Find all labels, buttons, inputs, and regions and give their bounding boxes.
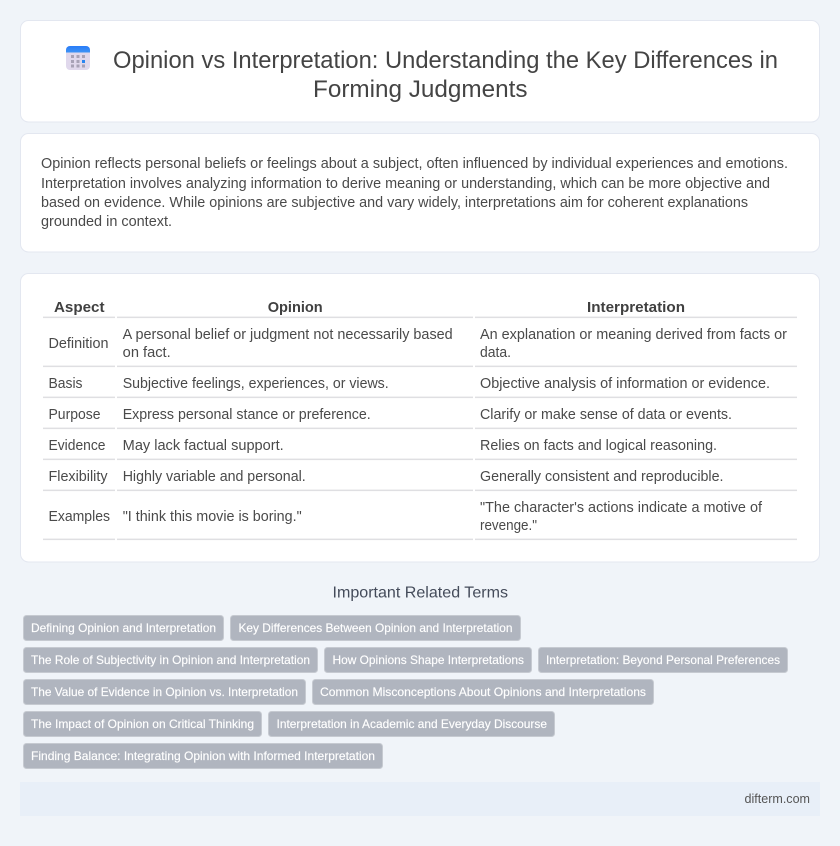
related term tags xyxy=(24,616,788,768)
panel: header xyxy=(20,20,820,122)
tag: Interpretation in Academic and Everyday Discourse xyxy=(276,717,547,731)
row: basis: Subjective feelings, experiences, or views. xyxy=(123,376,389,392)
tag xyxy=(24,680,306,704)
tag: The Value of Evidence in Opinion vs. Interpretation xyxy=(31,685,298,699)
text block: summary xyxy=(41,156,788,230)
row: purpose: Express personal stance or preference. xyxy=(123,407,371,423)
row: purpose: Clarify or make sense of data or events. xyxy=(480,407,732,423)
tag xyxy=(268,712,554,736)
row: evidence: Relies on facts and logical reasoning. xyxy=(480,438,717,454)
tag xyxy=(312,680,654,704)
row: examples: "The character's actions indicate a motive of xyxy=(480,500,763,516)
row: flexibility: Highly variable and personal. xyxy=(123,469,306,485)
title xyxy=(113,47,778,103)
icon: calendar xyxy=(66,46,90,70)
panel: summary paragraph xyxy=(20,134,820,252)
panel: comparison table xyxy=(20,274,820,562)
tag xyxy=(230,616,520,640)
row: flexibility: Generally consistent and reproducible. xyxy=(480,469,724,485)
row: flexibility: Flexibility xyxy=(48,469,108,485)
row: definition: on fact. xyxy=(123,345,171,361)
row: definition xyxy=(48,327,787,361)
table header: Interpretation xyxy=(587,299,685,316)
footer text: difterm.com xyxy=(744,791,810,806)
row: definition: Definition xyxy=(48,336,108,352)
tag: The Impact of Opinion on Critical Thinking xyxy=(31,717,254,731)
tag xyxy=(24,744,382,768)
row: examples: Examples xyxy=(48,509,110,525)
row: examples: revenge." xyxy=(480,518,537,534)
title: Forming Judgments xyxy=(313,76,528,103)
tag xyxy=(24,712,262,736)
row: definition: An explanation or meaning derived from facts or xyxy=(480,327,787,343)
row: examples: "I think this movie is boring." xyxy=(123,509,302,525)
table header: Aspect xyxy=(54,299,104,316)
tag: Finding Balance: Integrating Opinion with Informed Interpretation xyxy=(31,749,375,763)
tag: The Role of Subjectivity in Opinion and Interpretation xyxy=(31,653,310,667)
row: definition: A personal belief or judgment not necessarily based xyxy=(123,327,453,343)
row: definition: data. xyxy=(480,345,511,361)
tag: Interpretation: Beyond Personal Preferences xyxy=(546,653,780,667)
row: examples xyxy=(48,500,763,534)
table header: Opinion xyxy=(268,299,323,316)
text block: summary: Opinion reflects personal beliefs or feelings about a subject, often influenced by individual experiences and emotions. xyxy=(41,156,788,172)
tag: Defining Opinion and Interpretation xyxy=(31,621,216,635)
heading: important related terms: Important Related Terms xyxy=(332,584,508,602)
text block: summary: grounded in context. xyxy=(41,214,172,230)
footer bar xyxy=(20,782,820,816)
tag xyxy=(324,648,532,672)
tag xyxy=(24,648,318,672)
row: evidence: May lack factual support. xyxy=(123,438,284,454)
row: evidence: Evidence xyxy=(48,438,106,454)
row: purpose xyxy=(48,407,732,423)
table header xyxy=(54,299,685,316)
tag: Common Misconceptions About Opinions and Interpretations xyxy=(320,685,646,699)
tag: Key Differences Between Opinion and Interpretation xyxy=(238,621,512,635)
tag: How Opinions Shape Interpretations xyxy=(332,653,524,667)
row: basis: Basis xyxy=(48,376,82,392)
title: Opinion vs Interpretation: Understanding the Key Differences in xyxy=(113,47,778,74)
row: basis: Objective analysis of information or evidence. xyxy=(480,376,770,392)
text block: summary: based on evidence. While opinions are subjective and vary widely, interpretations aim for coherent explanations xyxy=(41,195,748,211)
tag xyxy=(24,616,224,640)
row: basis xyxy=(48,376,770,392)
text block: summary: Interpretation involves analyzing information to derive meaning or understanding, which can be more objective and xyxy=(41,176,770,192)
row: purpose: Purpose xyxy=(48,407,100,423)
tag xyxy=(538,648,788,672)
row: flexibility xyxy=(48,469,724,485)
row: evidence xyxy=(48,438,717,454)
